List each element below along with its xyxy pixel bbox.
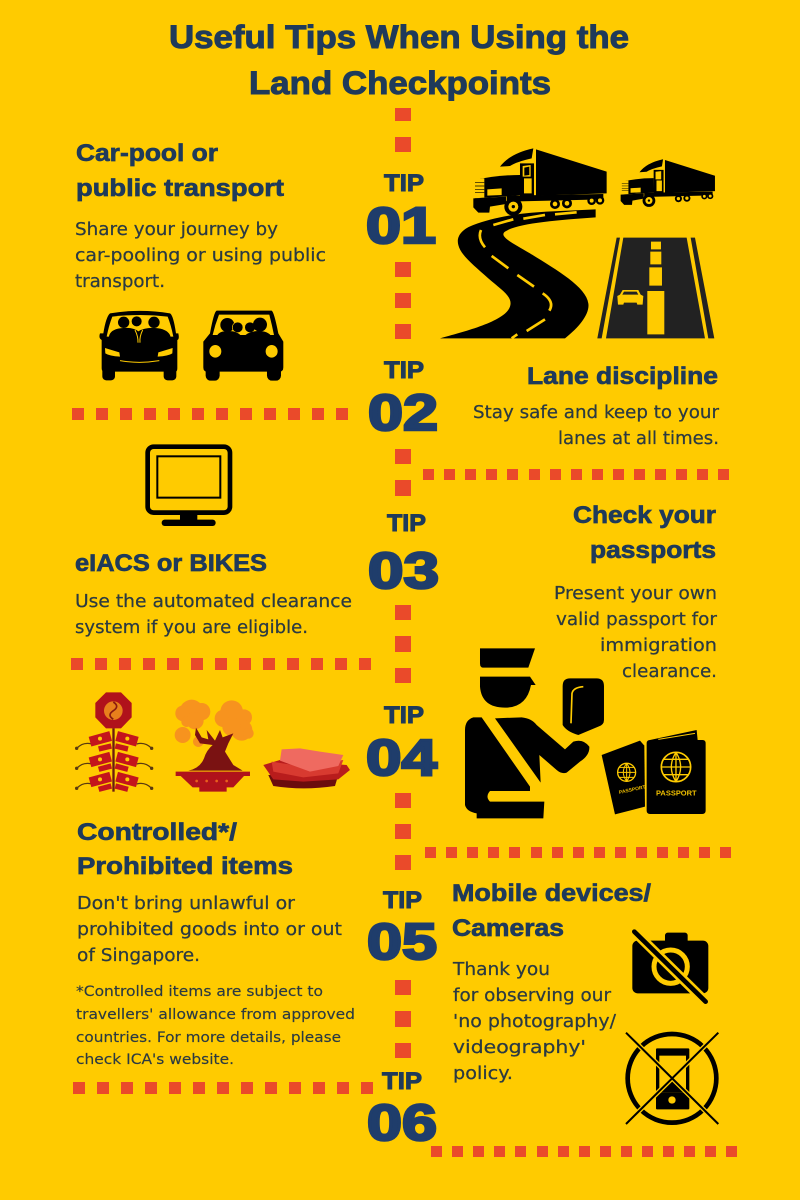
panel: tip 1 car-pool text: transport.	[75, 272, 165, 292]
icon: passports: PASSPORT	[656, 791, 697, 798]
tip 02 badge	[368, 357, 438, 441]
title	[169, 19, 629, 101]
icon: passports	[602, 730, 706, 814]
panel: tip 5 mobile devices text: Cameras	[452, 915, 564, 942]
icon: monitor	[148, 447, 230, 526]
panel: tip 3 eIACS text: Use the automated clearance	[75, 592, 352, 612]
panel: tip 5 mobile devices text: videography'	[453, 1038, 586, 1058]
icon: passports: PASSPORT	[618, 784, 646, 796]
tip 04 badge	[366, 702, 438, 786]
tip 01 badge: TIP	[384, 170, 424, 197]
icon: bonsai tree	[175, 700, 254, 792]
panel: tip 2 lane discipline text: Lane discipline	[527, 363, 718, 390]
panel: check your passports text: passports	[590, 537, 716, 564]
panel: check your passports text: Check your	[573, 502, 716, 529]
icon: immigration officer	[465, 648, 604, 818]
panel: tip 4 controlled items text: travellers' allowance from approved	[76, 1007, 355, 1023]
panel: tip 3 eIACS text: system if you are eligible.	[75, 618, 308, 638]
tip 05 badge	[367, 887, 437, 970]
tip 05 badge: 05	[367, 913, 437, 970]
panel: tip 4 controlled items text: prohibited goods into or out	[77, 920, 342, 940]
tip 06 badge	[367, 1068, 437, 1151]
tip 02 badge: 02	[368, 384, 438, 441]
tip 01 badge	[366, 170, 436, 254]
icon: no camera	[632, 931, 708, 1003]
tip 01 badge: 01	[366, 197, 436, 254]
panel: tip 2 lane discipline text	[473, 363, 720, 449]
panel: tip 1 car-pool text: public transport	[76, 175, 284, 202]
tip 03 badge: TIP	[387, 510, 426, 537]
panel: tip 5 mobile devices text: for observing our	[453, 986, 612, 1006]
icon: straight road with car	[597, 238, 714, 338]
panel: tip 4 controlled items text: of Singapore.	[77, 946, 200, 966]
panel: tip 4 controlled items text: Don't bring unlawful or	[77, 894, 296, 914]
title: Land Checkpoints	[249, 65, 551, 101]
panel: tip 5 mobile devices text: policy.	[453, 1064, 513, 1084]
panel: tip 5 mobile devices text: Mobile devices/	[452, 880, 651, 907]
icon: small truck	[621, 159, 715, 207]
truck	[473, 148, 607, 216]
panel: tip 2 lane discipline text: lanes at all times.	[558, 429, 719, 449]
panel: tip 1 car-pool text: car-pooling or using public	[75, 246, 326, 266]
tip 03 badge	[368, 510, 439, 599]
tip 05 badge: TIP	[383, 887, 422, 914]
icon: firecrackers	[75, 692, 153, 792]
tip 06 badge: 06	[367, 1094, 437, 1151]
panel: tip 1 car-pool text: Car-pool or	[76, 140, 218, 167]
panel: tip 1 car-pool text: Share your journey by	[75, 220, 278, 240]
icon: bak kwa meat	[263, 748, 350, 788]
panel: check your passports text: valid passport for	[556, 610, 718, 630]
panel: check your passports text	[554, 502, 718, 682]
icon: no mobile phone	[626, 1033, 718, 1124]
panel: tip 5 mobile devices text: 'no photography/	[453, 1012, 616, 1032]
icon: cars with passengers	[99, 311, 283, 381]
panel: tip 2 lane discipline text: Stay safe and keep to your	[473, 403, 720, 423]
panel: tip 4 controlled items text: *Controlled items are subject to	[76, 984, 323, 1000]
panel: check your passports text: Present your own	[554, 584, 717, 604]
panel: tip 3 eIACS text	[75, 550, 352, 638]
tip 04 badge: 04	[366, 729, 438, 786]
title: Useful Tips When Using the	[169, 19, 629, 55]
icon: winding road with truck	[440, 148, 607, 338]
tip 04 badge: TIP	[384, 702, 424, 729]
panel: tip 5 mobile devices text	[452, 880, 651, 1084]
panel: tip 4 controlled items text: check ICA's website.	[76, 1052, 234, 1068]
panel: tip 4 controlled items text: countries. For more details, please	[76, 1030, 341, 1046]
panel: check your passports text: clearance.	[622, 662, 717, 682]
panel: tip 5 mobile devices text: Thank you	[452, 960, 550, 980]
panel: tip 4 controlled items text: Prohibited items	[77, 853, 293, 880]
tip 02 badge: TIP	[384, 357, 424, 384]
panel: tip 3 eIACS text: eIACS or BIKES	[75, 550, 267, 577]
tip 06 badge: TIP	[382, 1068, 422, 1095]
panel: tip 1 car-pool text	[75, 140, 326, 292]
panel: check your passports text: immigration	[600, 636, 717, 656]
panel: tip 4 controlled items text	[76, 819, 355, 1068]
panel: tip 4 controlled items text: Controlled*/	[77, 819, 237, 846]
tip 03 badge: 03	[368, 542, 439, 599]
